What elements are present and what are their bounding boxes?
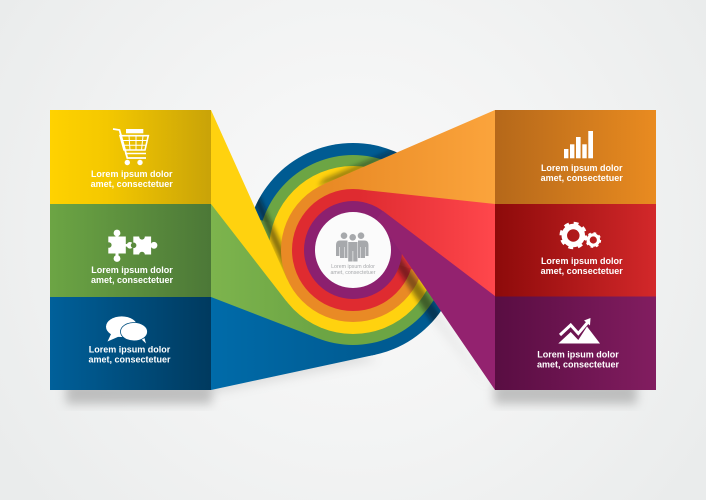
icon: bar chart (564, 131, 593, 158)
text: red panel (541, 256, 623, 276)
text: orange panel: amet, consectetuer (541, 173, 623, 183)
text: blue panel: amet, consectetuer (88, 354, 171, 364)
shadow of purple ribbon on rings (396, 254, 441, 324)
text: orange panel: Lorem ipsum dolor (541, 163, 623, 173)
centre text (330, 264, 376, 276)
band: yellow ring (269, 166, 437, 334)
shadow under left panels (66, 382, 212, 404)
centre white circle (315, 212, 391, 288)
shadow of yellow ribbon on rings (255, 195, 288, 280)
text: yellow panel (91, 169, 173, 189)
panel: purple (495, 296, 656, 390)
icon: mountain trend (558, 318, 600, 344)
band: yellow ribbon (211, 110, 353, 302)
text: green panel: Lorem ipsum dolor (91, 265, 173, 275)
panel: green (50, 204, 211, 297)
icon: gears (561, 223, 600, 248)
band: red ring and ribbon (292, 189, 495, 311)
text: purple panel: amet, consectetuer (537, 360, 620, 370)
text: blue panel (88, 344, 171, 364)
band: green ring and ribbon (211, 155, 448, 345)
text: orange panel (541, 163, 623, 183)
panel: orange (495, 110, 656, 204)
text: yellow panel: Lorem ipsum dolor (91, 169, 173, 179)
text: yellow panel: amet, consectetuer (91, 179, 173, 189)
panel: yellow (50, 110, 211, 204)
text: purple panel: Lorem ipsum dolor (537, 350, 619, 360)
band: purple ring and ribbon (304, 201, 495, 390)
centre text: amet, consectetuer (330, 270, 376, 276)
shadow under blue band (211, 345, 378, 394)
centre text: Lorem ipsum dolor (331, 264, 375, 270)
shadow under right panels (494, 382, 637, 404)
text: blue panel: Lorem ipsum dolor (89, 344, 171, 354)
icon: speech bubbles (106, 316, 148, 344)
text: green panel (91, 265, 174, 285)
panel: blue (50, 297, 211, 390)
band: orange ring and ribbon (281, 110, 495, 322)
text: red panel: Lorem ipsum dolor (541, 256, 623, 266)
shadow of purple band (388, 242, 490, 392)
icon: shopping cart (113, 129, 148, 165)
panel: red (495, 204, 656, 296)
text: green panel: amet, consectetuer (91, 275, 174, 285)
band: blue ring and ribbon (211, 143, 460, 390)
text: purple panel (537, 350, 620, 370)
icon: puzzle pieces (106, 230, 157, 262)
text: red panel: amet, consectetuer (541, 266, 623, 276)
shadow of orange ribbon on rings (318, 149, 397, 186)
icon: people group (336, 232, 368, 262)
